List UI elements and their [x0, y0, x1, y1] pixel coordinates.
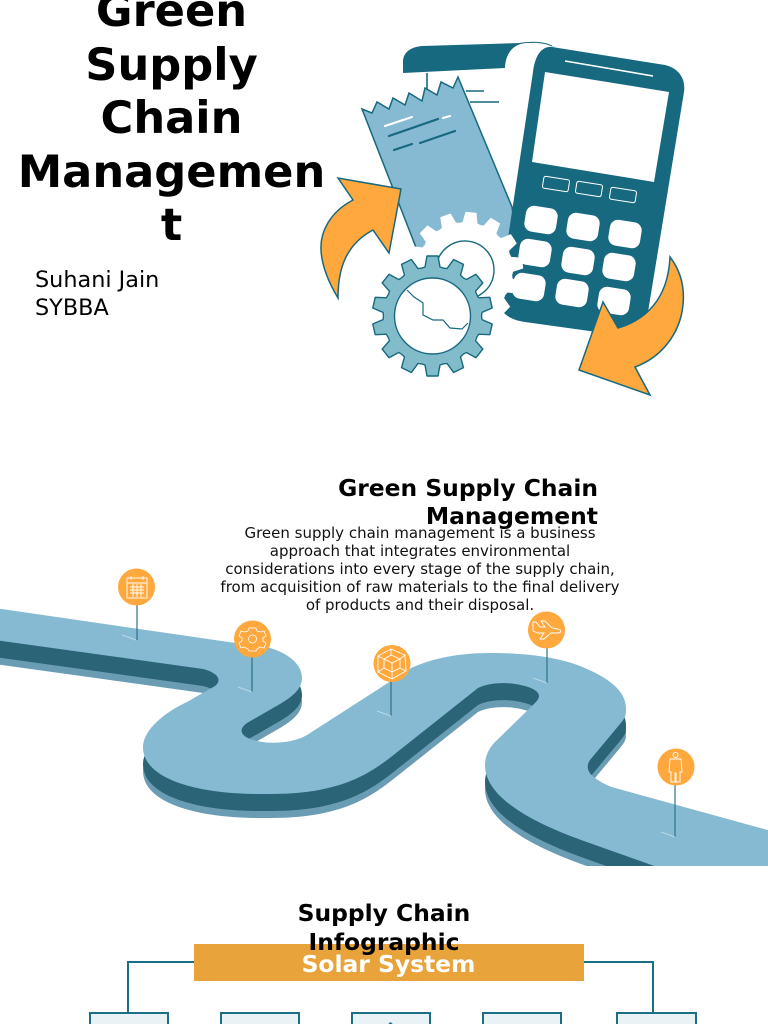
description text: from acquisition of raw materials to the final delivery: [220, 578, 620, 596]
white gear: [400, 206, 530, 334]
pin: calendar: [118, 568, 155, 640]
section heading: Supply Chain Infographic: [298, 899, 470, 956]
section heading: Supply Chain Infographic: Infographic: [309, 928, 459, 956]
section heading: Green Supply Chain Management: [338, 474, 598, 530]
banner label: Solar System: [302, 950, 475, 978]
arrow: right orange: [579, 257, 683, 395]
title: [18, 0, 325, 251]
description text: [220, 524, 620, 614]
function buttons: [542, 176, 637, 203]
pin: airplane: [528, 612, 565, 683]
title: t: [161, 199, 182, 251]
pin: person: [658, 748, 694, 837]
title: Supply: [85, 39, 258, 91]
author: Suhani Jain: [35, 267, 159, 293]
author: [35, 267, 159, 321]
teal gear: [372, 256, 493, 376]
section heading: Green Supply Chain Management: Management: [426, 502, 598, 530]
illustration: calculator, receipt, gears and arrows: [321, 42, 684, 395]
number keys: [511, 205, 643, 316]
pin: cube box: [374, 645, 410, 716]
icon tip in centre box: [386, 1022, 395, 1024]
description text: of products and their disposal.: [306, 596, 534, 614]
description text: considerations into every stage of the supply chain,: [225, 560, 615, 578]
title: Chain: [101, 92, 242, 144]
calculator: [499, 47, 684, 338]
calculator screen: [532, 72, 669, 182]
connector lines: [128, 962, 653, 1013]
paper document behind calculator: [403, 42, 556, 200]
pin: gear: [234, 620, 271, 692]
arrow: left orange: [321, 178, 401, 298]
banner: Solar System: [194, 944, 584, 981]
receipt: [362, 77, 520, 260]
title: Managemen: [18, 146, 325, 198]
description text: approach that integrates environmental: [270, 542, 570, 560]
section heading: Green Supply Chain Management: Green Supply Chain: [338, 474, 598, 502]
boxes row: [90, 1013, 696, 1024]
white gear outline seen through hole: [407, 290, 468, 329]
winding road: [0, 608, 768, 866]
description text: Green supply chain management is a business: [244, 524, 596, 542]
section heading: Supply Chain Infographic: Supply Chain: [298, 899, 470, 927]
author: SYBBA: [35, 295, 109, 321]
